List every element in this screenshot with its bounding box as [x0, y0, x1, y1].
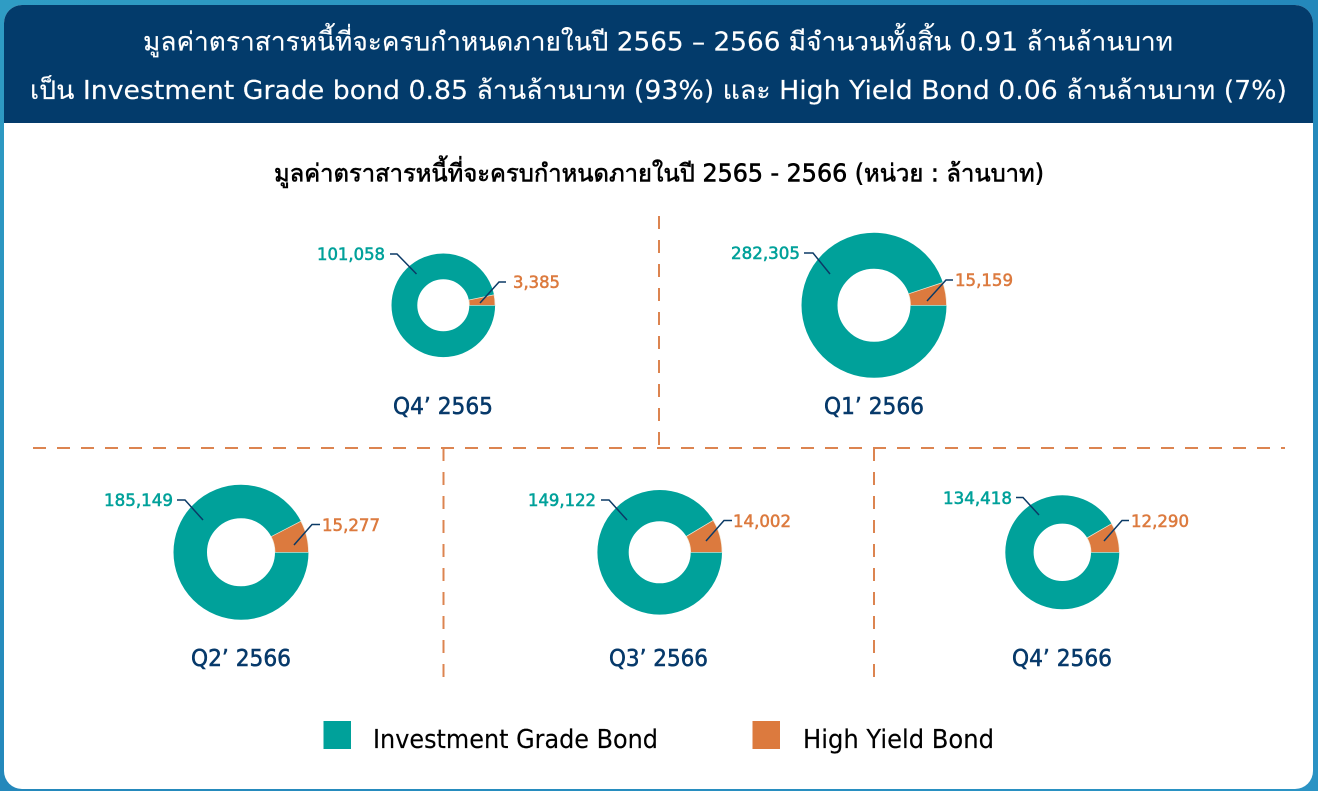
donut chart: Q4 2565: 3,385 [513, 273, 560, 292]
donut chart: Q4 2565: 101,058 [317, 245, 385, 264]
donut chart: Q1 2566 [731, 244, 1013, 420]
donut chart: Q3 2566: Q3’ 2566 [609, 646, 708, 672]
donut chart: Q2 2566: Q2’ 2566 [191, 646, 291, 672]
donut chart: Q3 2566: 14,002 [733, 512, 791, 531]
donut chart: Q2 2566: 15,277 [322, 516, 380, 535]
donut chart: Q3 2566 [528, 491, 791, 672]
donut chart: Q2 2566 [104, 491, 380, 672]
chart subtitle: มูลค่าตราสารหนี้ที่จะครบกำหนดภายในปี 2565 - 2566 (หน่วย : ล้านบาท) [274, 156, 1044, 188]
donut chart: Q4 2566 [943, 489, 1189, 672]
heading line 2: เป็น Investment Grade bond 0.85 ล้านล้านบาท (93%) และ High Yield Bond 0.06 ล้านล้านบาท (7%) [30, 74, 1287, 106]
heading line 1: มูลค่าตราสารหนี้ที่จะครบกำหนดภายในปี 2565 – 2566 มีจำนวนทั้งสิ้น 0.91 ล้านล้านบาท [143, 22, 1173, 58]
donut chart: Q4 2566: Q4’ 2566 [1012, 646, 1112, 672]
donut chart: Q4 2566: 134,418 [943, 489, 1012, 508]
legend swatch: Investment Grade Bond [324, 721, 351, 749]
donut chart: Q1 2566: Q1’ 2566 [824, 394, 924, 420]
donut chart: Q1 2566: 15,159 [955, 271, 1013, 290]
legend [324, 721, 994, 755]
donut chart: Q1 2566: 282,305 [731, 244, 800, 263]
legend swatch: High Yield Bond [752, 721, 780, 749]
donut chart: Q2 2566: 185,149 [104, 491, 173, 510]
donut chart: Q4 2565 [317, 245, 560, 420]
donut chart: Q3 2566: 149,122 [528, 491, 596, 510]
donut chart: Q4 2566: 12,290 [1131, 512, 1189, 531]
legend label: Investment Grade Bond: Investment Grade Bond [373, 725, 658, 755]
legend label: High Yield Bond: High Yield Bond [803, 725, 994, 755]
donut chart: Q4 2565: Q4’ 2565 [393, 394, 493, 420]
header banner [4, 5, 1313, 123]
